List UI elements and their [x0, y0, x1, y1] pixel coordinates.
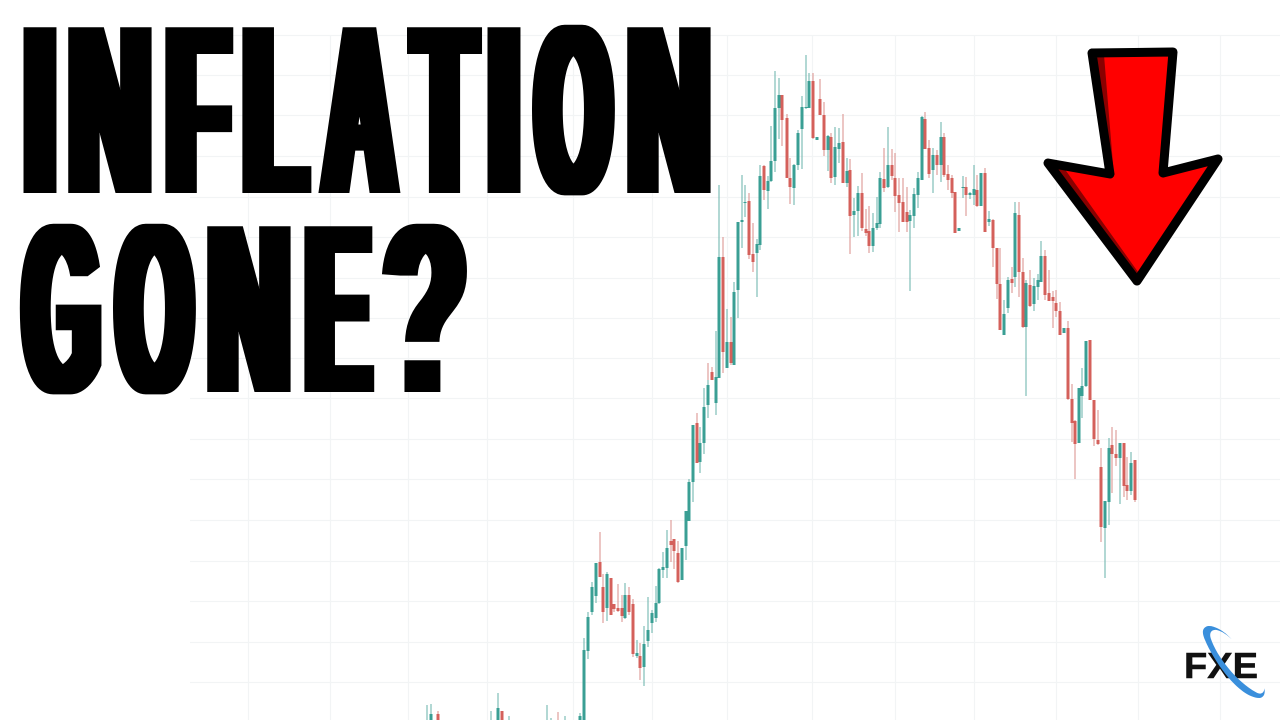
heading line 2: O: [118, 175, 191, 444]
title: INFLATION GONE?: [24, 0, 710, 444]
green candle bodies: [431, 81, 1131, 720]
candlestick price chart: [427, 55, 1135, 720]
icon: red down arrow: [1048, 52, 1218, 281]
heading line 2: ?: [384, 175, 466, 444]
red candle bodies: [438, 81, 1135, 720]
heading line 2: E: [307, 175, 369, 444]
green candle wicks: [427, 55, 1131, 720]
red candle wicks: [438, 73, 1135, 720]
logo wordmark: FXE: [1184, 645, 1258, 686]
logo: FXE: [1184, 626, 1265, 698]
heading line 2: N: [208, 175, 290, 444]
logo swoosh: [1203, 626, 1265, 698]
heading line 2: G: [24, 175, 99, 444]
